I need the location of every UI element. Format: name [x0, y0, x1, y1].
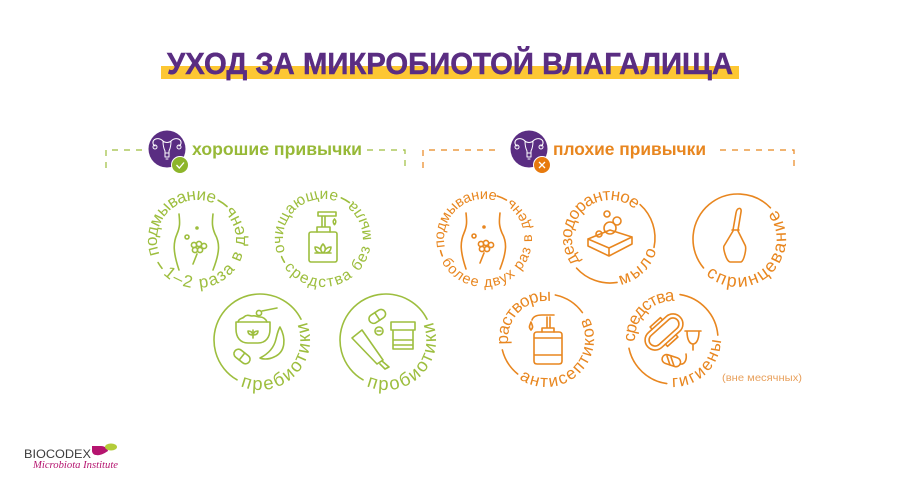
habit: probiotics: пробиотики	[368, 323, 436, 394]
habit: prebiotics: пребиотики	[242, 323, 310, 394]
heading: good habits	[106, 130, 405, 174]
icon: soap with bubbles	[588, 211, 632, 256]
icon: soap bottle	[309, 212, 337, 262]
logo: Biocodex Microbiota Institute: BIOCODEX	[24, 449, 91, 461]
habit: hygiene products: гигиены	[672, 340, 722, 388]
habit: prebiotics	[213, 293, 310, 394]
note: outside menstruation: (вне месячных)	[722, 372, 802, 384]
heading: bad habits: плохие привычки	[553, 139, 706, 159]
habit: washing more than twice a day: более двух раз в день	[443, 200, 534, 290]
habit: washing more than twice a day: подмывание	[436, 191, 496, 248]
habit: deodorant soap: мыло	[619, 249, 656, 285]
heading: bad habits	[423, 130, 794, 174]
habit: washing 1-2 times a day: подмывание	[148, 190, 216, 256]
habit: deodorant soap: дезодорантное	[563, 191, 638, 264]
habit: antiseptic solutions	[498, 292, 594, 387]
logo: Biocodex Microbiota Institute	[24, 444, 118, 471]
icon: douche bulb	[724, 208, 746, 262]
habit: antiseptic solutions: антисептиков	[520, 318, 594, 387]
habit: hygiene products: средства	[626, 292, 675, 341]
panel: good habits	[105, 130, 436, 394]
panel: bad habits	[422, 130, 802, 388]
habit: douching: спринцевание	[708, 211, 786, 290]
habit: soap-free cleansers: очищающие	[274, 190, 338, 253]
icon: bowl, banana, capsule	[232, 308, 284, 366]
icon: capsule, pill, jar, tube	[352, 308, 415, 369]
habit: hygiene products	[626, 292, 802, 388]
habit: washing 1-2 times a day: 1–2 раза в день	[164, 208, 248, 292]
icon: antiseptic bottle	[529, 315, 562, 364]
icon: pad, cup, tampon	[639, 308, 701, 368]
title: УХОД ЗА МИКРОБИОТОЙ ВЛАГАЛИЩА	[167, 45, 733, 81]
heading: good habits: хорошие привычки	[192, 139, 362, 159]
habit: antiseptic solutions: растворы	[498, 292, 550, 344]
habit: deodorant soap	[563, 191, 656, 285]
habit: soap-free cleansers: средства без мыла	[286, 201, 372, 290]
logo: Biocodex Microbiota Institute: Microbiota Institute	[32, 459, 118, 471]
habit: probiotics	[339, 293, 436, 394]
